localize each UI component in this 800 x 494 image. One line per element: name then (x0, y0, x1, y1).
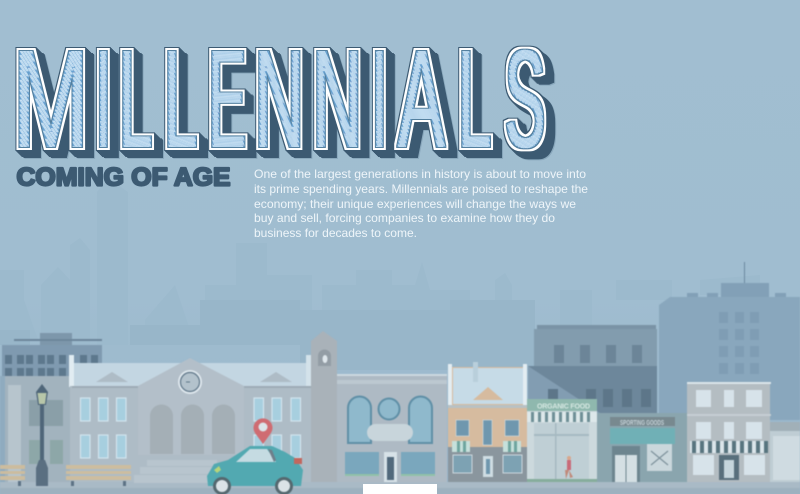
title: MILLENNIALS: I (372, 21, 387, 177)
map pin (254, 418, 272, 444)
title: MILLENNIALS: M (13, 21, 89, 177)
door (612, 446, 640, 482)
ground and sidewalk (0, 482, 800, 494)
steps (134, 460, 218, 483)
shop sign text: SPORTING GOODS (620, 420, 664, 427)
intro paragraph: business for decades to come. (254, 226, 417, 240)
striped awning (690, 441, 768, 453)
sporting goods shop (597, 413, 687, 482)
title: MILLENNIALS: L (458, 21, 491, 177)
door (384, 452, 397, 482)
subtitle: COMING OF AGE: COMING OF AGE (16, 164, 231, 192)
intro paragraph (254, 167, 588, 240)
far right shop (770, 422, 800, 482)
title: MILLENNIALS (13, 21, 545, 177)
library building (69, 355, 311, 483)
title: MILLENNIALS: S (505, 21, 545, 177)
awnings (452, 441, 521, 452)
teal car (207, 446, 303, 494)
title: MILLENNIALS: L (164, 21, 197, 177)
upper windows (456, 420, 519, 445)
intro paragraph: One of the largest generations in history is about to move into (254, 167, 586, 181)
grey-blue building behind shops (528, 325, 657, 416)
intro paragraph: its prime spending years. Millennials are poised to reshape the (254, 182, 588, 196)
near skyline haze (0, 300, 535, 370)
clock (178, 370, 202, 394)
arches (150, 404, 235, 454)
title: MILLENNIALS: L (119, 21, 152, 177)
title: MILLENNIALS: I (96, 21, 111, 177)
arched windows (348, 396, 432, 443)
organic food shop (527, 399, 597, 482)
blue office building, back right (659, 262, 800, 420)
shop windows (453, 455, 522, 473)
boutique shop (337, 374, 447, 482)
beige corner building (687, 382, 771, 482)
benches (0, 465, 131, 486)
title: MILLENNIALS: N (255, 23, 304, 177)
street lamp (36, 384, 48, 486)
title: MILLENNIALS: E (209, 21, 246, 177)
back left apartment (2, 333, 102, 379)
title: MILLENNIALS: A (398, 22, 445, 177)
oval shop sign (367, 424, 413, 441)
grey building with fire escape (0, 376, 73, 484)
tan townhouse (448, 362, 527, 482)
shop sign text: ORGANIC FOOD (537, 404, 590, 410)
teal awning (610, 428, 675, 444)
display windows (345, 452, 435, 476)
clock tower (311, 331, 337, 482)
far skyline silhouettes (0, 178, 760, 345)
library windows (80, 398, 300, 458)
intro paragraph: buy and sell, forcing companies to examine how they do (254, 211, 555, 225)
intro paragraph: economy; their unique experiences will change the ways we (254, 197, 576, 211)
poster (647, 444, 672, 471)
white footer tab (363, 484, 437, 494)
runner figure (565, 456, 573, 479)
city scene (0, 262, 800, 494)
title: MILLENNIALS: N (313, 23, 362, 177)
